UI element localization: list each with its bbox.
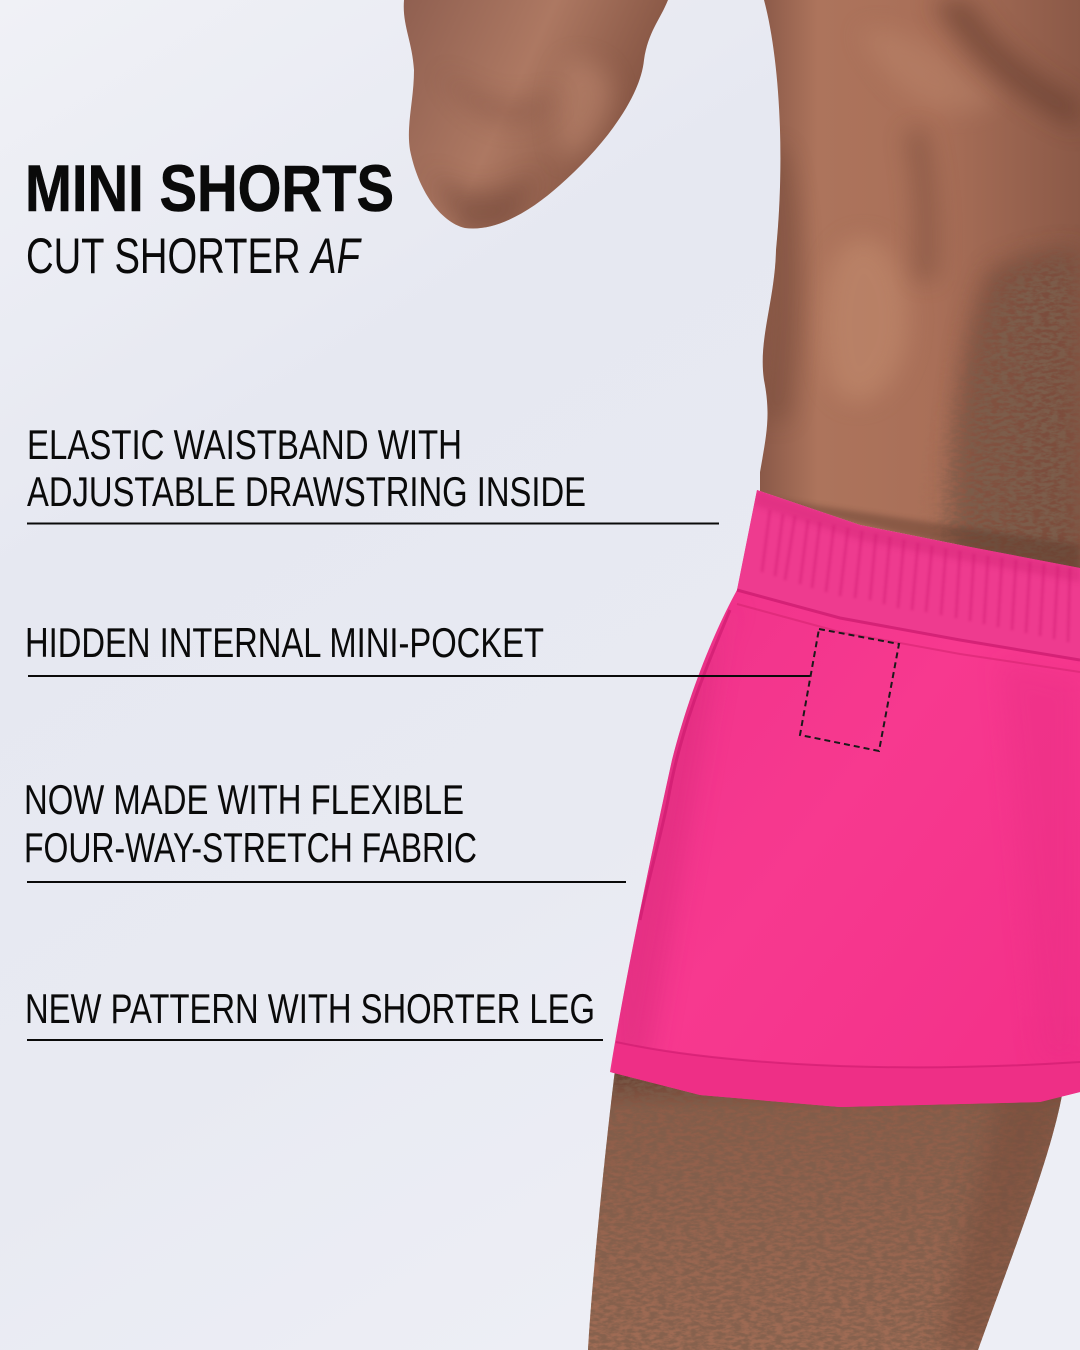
callout: waistband: ADJUSTABLE DRAWSTRING INSIDE bbox=[27, 468, 586, 515]
shorts waistband bbox=[737, 490, 1080, 660]
callout: waistband bbox=[27, 421, 719, 524]
waistband gathers bbox=[762, 510, 1070, 642]
body hair bbox=[949, 255, 1080, 575]
shorts hem bbox=[612, 1052, 1080, 1107]
callout: pocket bbox=[25, 619, 899, 751]
callout: waistband: ELASTIC WAISTBAND WITH bbox=[27, 421, 462, 468]
photo: pink shorts bbox=[600, 485, 1080, 1115]
title: MINI SHORTS bbox=[25, 151, 394, 225]
callout: fabric: NOW MADE WITH FLEXIBLE bbox=[24, 776, 464, 823]
pocket outline bbox=[800, 629, 899, 751]
photo: model torso bbox=[757, 0, 1080, 575]
leg hair bbox=[585, 1065, 1065, 1350]
photo: model arm bbox=[400, 0, 670, 235]
photo: model leg bbox=[585, 1065, 1070, 1350]
callout: fabric bbox=[24, 776, 626, 882]
callout: leg: NEW PATTERN WITH SHORTER LEG bbox=[25, 985, 595, 1032]
side seam bbox=[640, 610, 730, 920]
waistband seam bbox=[737, 590, 1080, 660]
callout: fabric: FOUR-WAY-STRETCH FABRIC bbox=[24, 824, 477, 871]
callout: pocket: HIDDEN INTERNAL MINI-POCKET bbox=[25, 619, 544, 666]
title bbox=[25, 151, 394, 284]
subtitle: CUT SHORTER AF bbox=[26, 228, 362, 284]
